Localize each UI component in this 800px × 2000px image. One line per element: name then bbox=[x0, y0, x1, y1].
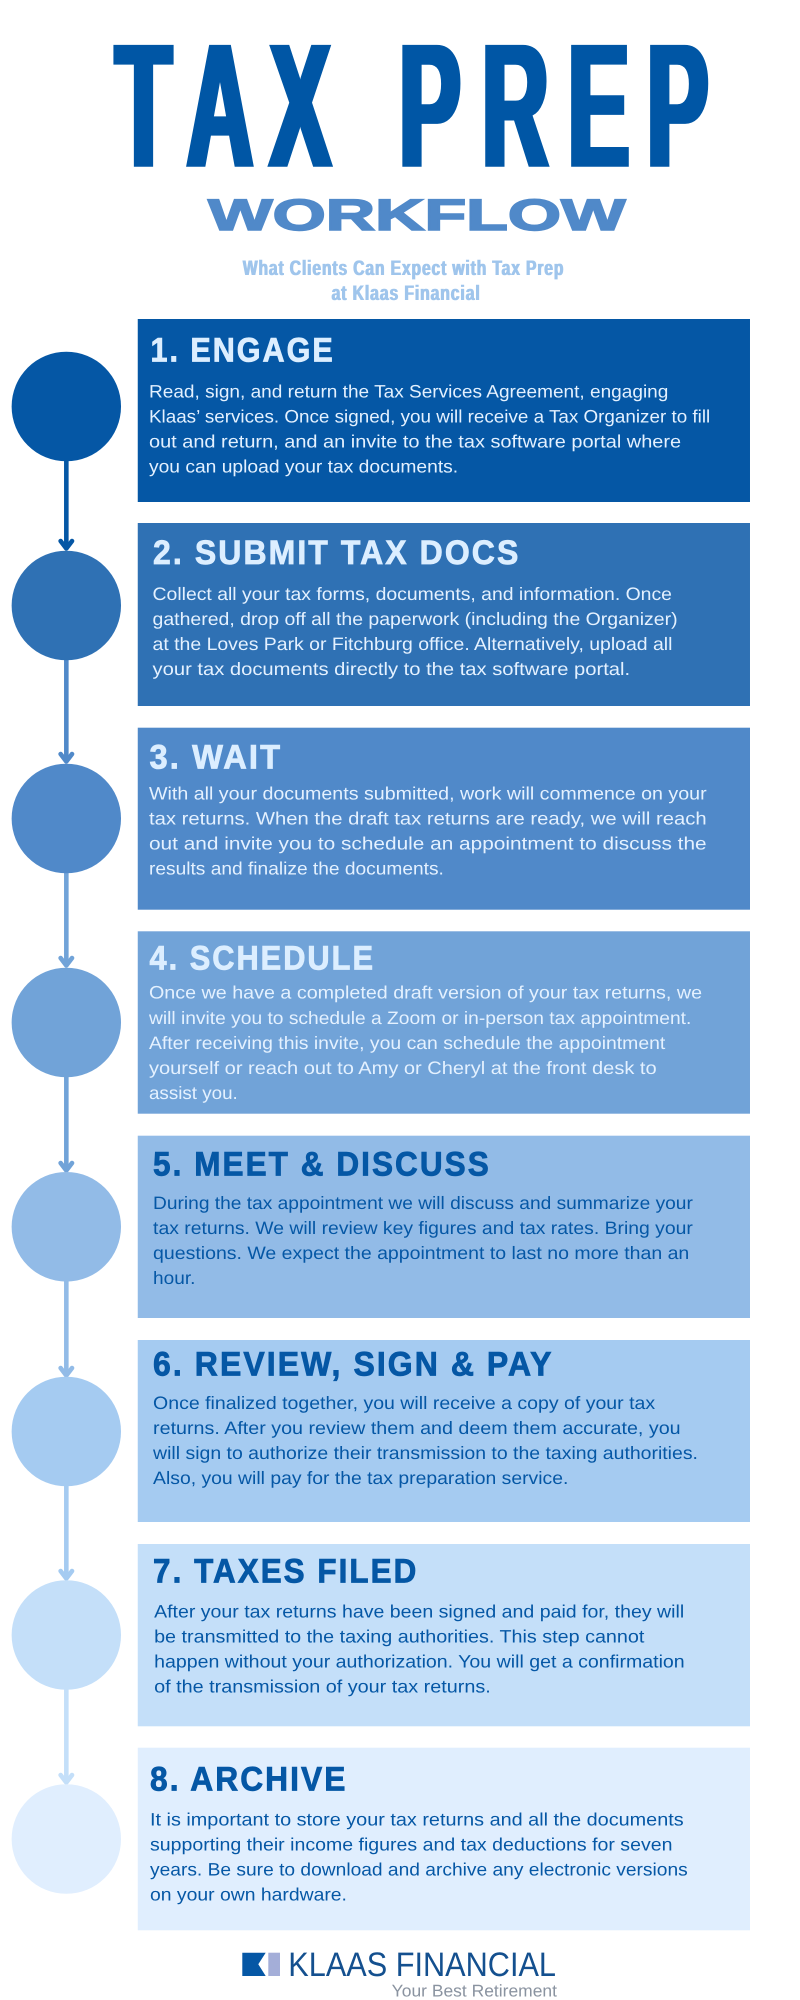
tagline: at Klaas Financial bbox=[332, 282, 481, 305]
text block: step 2: Collect all your tax forms, documents, and information. Once bbox=[153, 584, 672, 604]
text block: step 3: out and invite you to schedule an appointment to discuss the bbox=[149, 833, 707, 853]
text block: step 8: supporting their income figures and tax deductions for seven bbox=[150, 1834, 672, 1854]
text block: step 7: of the transmission of your tax returns. bbox=[154, 1676, 491, 1696]
timeline arrow 3 to 4 bbox=[61, 873, 72, 966]
timeline arrow 2 to 3 bbox=[61, 660, 72, 762]
circle 4 bbox=[12, 968, 121, 1077]
heading: 2. submit tax docs: 2. SUBMIT TAX DOCS bbox=[153, 534, 520, 572]
text block: step 5: questions. We expect the appointment to last no more than an bbox=[153, 1243, 689, 1263]
text block: step 5: tax returns. We will review key figures and tax rates. Bring your bbox=[153, 1218, 693, 1238]
text block: step 3: results and finalize the documents. bbox=[149, 858, 444, 878]
circle 7 bbox=[12, 1580, 121, 1690]
text block: step 1: you can upload your tax documents. bbox=[149, 456, 458, 476]
heading: 7. taxes filed: 7. TAXES FILED bbox=[153, 1552, 418, 1590]
text block: step 2: at the Loves Park or Fitchburg office. Alternatively, upload all bbox=[153, 634, 672, 654]
timeline arrow 6 to 7 bbox=[61, 1486, 72, 1578]
text block: step 4: Once we have a completed draft version of your tax returns, we bbox=[149, 983, 702, 1003]
text block: step 6: Once finalized together, you will receive a copy of your tax bbox=[153, 1393, 655, 1413]
text block: step 1: Read, sign, and return the Tax Services Agreement, engaging bbox=[149, 381, 668, 401]
text block: step 1 bbox=[149, 381, 710, 476]
tagline: What Clients Can Expect with Tax Prep bbox=[243, 257, 564, 280]
timeline arrow 4 to 5 bbox=[61, 1077, 72, 1170]
text block: step 2: gathered, drop off all the paperwork (including the Organizer) bbox=[153, 609, 678, 629]
text block: step 5: hour. bbox=[153, 1268, 195, 1288]
circle 2 bbox=[12, 551, 121, 660]
text block: step 6: will sign to authorize their transmission to the taxing authorities. bbox=[152, 1443, 698, 1463]
title: TAX PREP bbox=[115, 7, 708, 205]
circle 1 bbox=[12, 352, 121, 461]
text block: step 7: happen without your authorization. You will get a confirmation bbox=[154, 1651, 685, 1671]
text block: step 8: years. Be sure to download and archive any electronic versions bbox=[150, 1859, 688, 1879]
panel: step 3 wait bbox=[138, 728, 750, 910]
text block: step 2: your tax documents directly to the tax software portal. bbox=[153, 659, 630, 679]
circle 8 bbox=[12, 1784, 121, 1894]
logo wordmark: KLAAS FINANCIAL bbox=[288, 1946, 556, 1984]
text block: step 6: Also, you will pay for the tax preparation service. bbox=[153, 1468, 568, 1488]
text block: step 3: With all your documents submitted, work will commence on your bbox=[149, 783, 707, 803]
logo: klaas financial bbox=[242, 1946, 557, 2000]
text block: step 6 bbox=[152, 1393, 698, 1488]
text block: step 6: returns. After you review them and deem them accurate, you bbox=[153, 1418, 681, 1438]
heading: 5. meet and discuss: 5. MEET & DISCUSS bbox=[153, 1145, 491, 1183]
heading: 6. review, sign and pay: 6. REVIEW, SIGN & PAY bbox=[153, 1346, 554, 1384]
text block: step 7 bbox=[154, 1601, 685, 1696]
panel: step 8 archive bbox=[138, 1748, 750, 1930]
text block: step 3 bbox=[149, 783, 707, 878]
heading: 4. schedule: 4. SCHEDULE bbox=[149, 939, 375, 977]
text block: step 8: on your own hardware. bbox=[150, 1884, 347, 1904]
circle 5 bbox=[12, 1172, 121, 1282]
timeline arrow 7 to 8 bbox=[61, 1690, 72, 1782]
panel: step 7 taxes filed bbox=[138, 1544, 750, 1726]
heading: 8. archive: 8. ARCHIVE bbox=[150, 1761, 347, 1799]
panel: step 6 review, sign and pay bbox=[138, 1340, 750, 1522]
panel: step 4 schedule bbox=[138, 931, 750, 1114]
text block: step 7: be transmitted to the taxing authorities. This step cannot bbox=[154, 1626, 644, 1646]
text block: step 4: will invite you to schedule a Zoom or in-person tax appointment. bbox=[148, 1008, 691, 1028]
text block: step 4 bbox=[148, 983, 702, 1103]
text block: step 3: tax returns. When the draft tax returns are ready, we will reach bbox=[149, 808, 707, 828]
text block: step 4: assist you. bbox=[149, 1083, 238, 1103]
circle 6 bbox=[12, 1377, 121, 1486]
timeline arrow 1 to 2 bbox=[61, 461, 72, 548]
text block: step 5: During the tax appointment we will discuss and summarize your bbox=[153, 1193, 693, 1213]
text block: step 1: out and return, and an invite to the tax software portal where bbox=[149, 431, 681, 451]
panel: step 1 engage bbox=[138, 319, 750, 502]
text block: step 8: It is important to store your tax returns and all the documents bbox=[150, 1809, 684, 1829]
heading: 1. engage: 1. ENGAGE bbox=[151, 332, 335, 370]
text block: step 4: After receiving this invite, you can schedule the appointment bbox=[149, 1033, 665, 1053]
tagline bbox=[243, 257, 564, 305]
subtitle: workflow: WORKFLOW bbox=[208, 191, 626, 240]
text block: step 4: yourself or reach out to Amy or Cheryl at the front desk to bbox=[149, 1058, 657, 1078]
text block: step 1: Klaas’ services. Once signed, you will receive a Tax Organizer to fill bbox=[149, 406, 710, 426]
text block: step 2 bbox=[153, 584, 678, 679]
heading: 3. wait: 3. WAIT bbox=[149, 739, 282, 777]
icon: klaas k mark bbox=[242, 1953, 280, 1976]
text block: step 5 bbox=[153, 1193, 693, 1288]
panel: step 5 meet and discuss bbox=[138, 1136, 750, 1318]
circle 3 bbox=[12, 764, 121, 873]
text block: step 7: After your tax returns have been signed and paid for, they will bbox=[154, 1601, 684, 1621]
timeline arrow 5 to 6 bbox=[61, 1281, 72, 1376]
panel: step 2 submit tax docs bbox=[138, 523, 750, 706]
text block: step 8 bbox=[150, 1809, 688, 1904]
